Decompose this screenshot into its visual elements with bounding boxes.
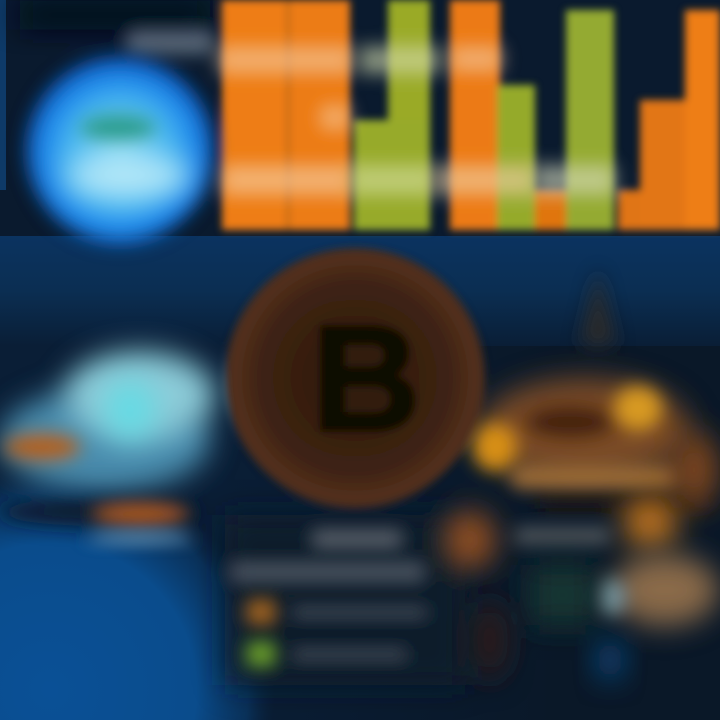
legend title: [312, 530, 402, 548]
cloud icon: [0, 351, 215, 544]
bar: green base: [354, 120, 430, 230]
tan layer: [510, 466, 680, 488]
dark sky corner: [20, 0, 210, 30]
bar: orange step mid: [640, 100, 690, 230]
gold highlight left: [473, 423, 517, 471]
panel: bar chart: [222, 0, 720, 230]
coin symbol: B: [312, 294, 420, 462]
dark base: [0, 498, 200, 526]
globe land: [80, 114, 156, 142]
gold highlight right: [614, 386, 662, 430]
bar: orange three: [450, 0, 500, 230]
globe highlight: [66, 156, 190, 196]
right gold stack: [473, 270, 719, 626]
legend swatch: green: [247, 642, 275, 666]
upper light band: [125, 30, 502, 74]
bar: green stem: [388, 0, 430, 135]
bar: green tall: [566, 10, 614, 230]
orange accent bottom: [92, 503, 188, 525]
bar gap: [286, 0, 290, 230]
legend swatch: orange: [247, 600, 275, 624]
panel: legend: [225, 515, 465, 685]
icon: bitcoin coin: [225, 248, 485, 508]
bar: green two: [497, 85, 535, 230]
legend subtitle: [230, 562, 425, 582]
side caption block: [444, 510, 624, 680]
orange accent left: [4, 434, 80, 460]
legend label: orange: [292, 606, 427, 619]
bar: orange short: [535, 190, 569, 230]
bar: orange tall one: [222, 0, 286, 230]
bar: orange step high: [685, 10, 720, 230]
lower light band: [222, 105, 615, 195]
legend label: green: [292, 648, 407, 661]
icon: blue globe: [26, 56, 214, 244]
bar: orange step low: [618, 190, 648, 230]
lower tan pile: [611, 554, 719, 626]
dark spire: [580, 270, 616, 345]
bar: orange tall two: [290, 0, 350, 230]
